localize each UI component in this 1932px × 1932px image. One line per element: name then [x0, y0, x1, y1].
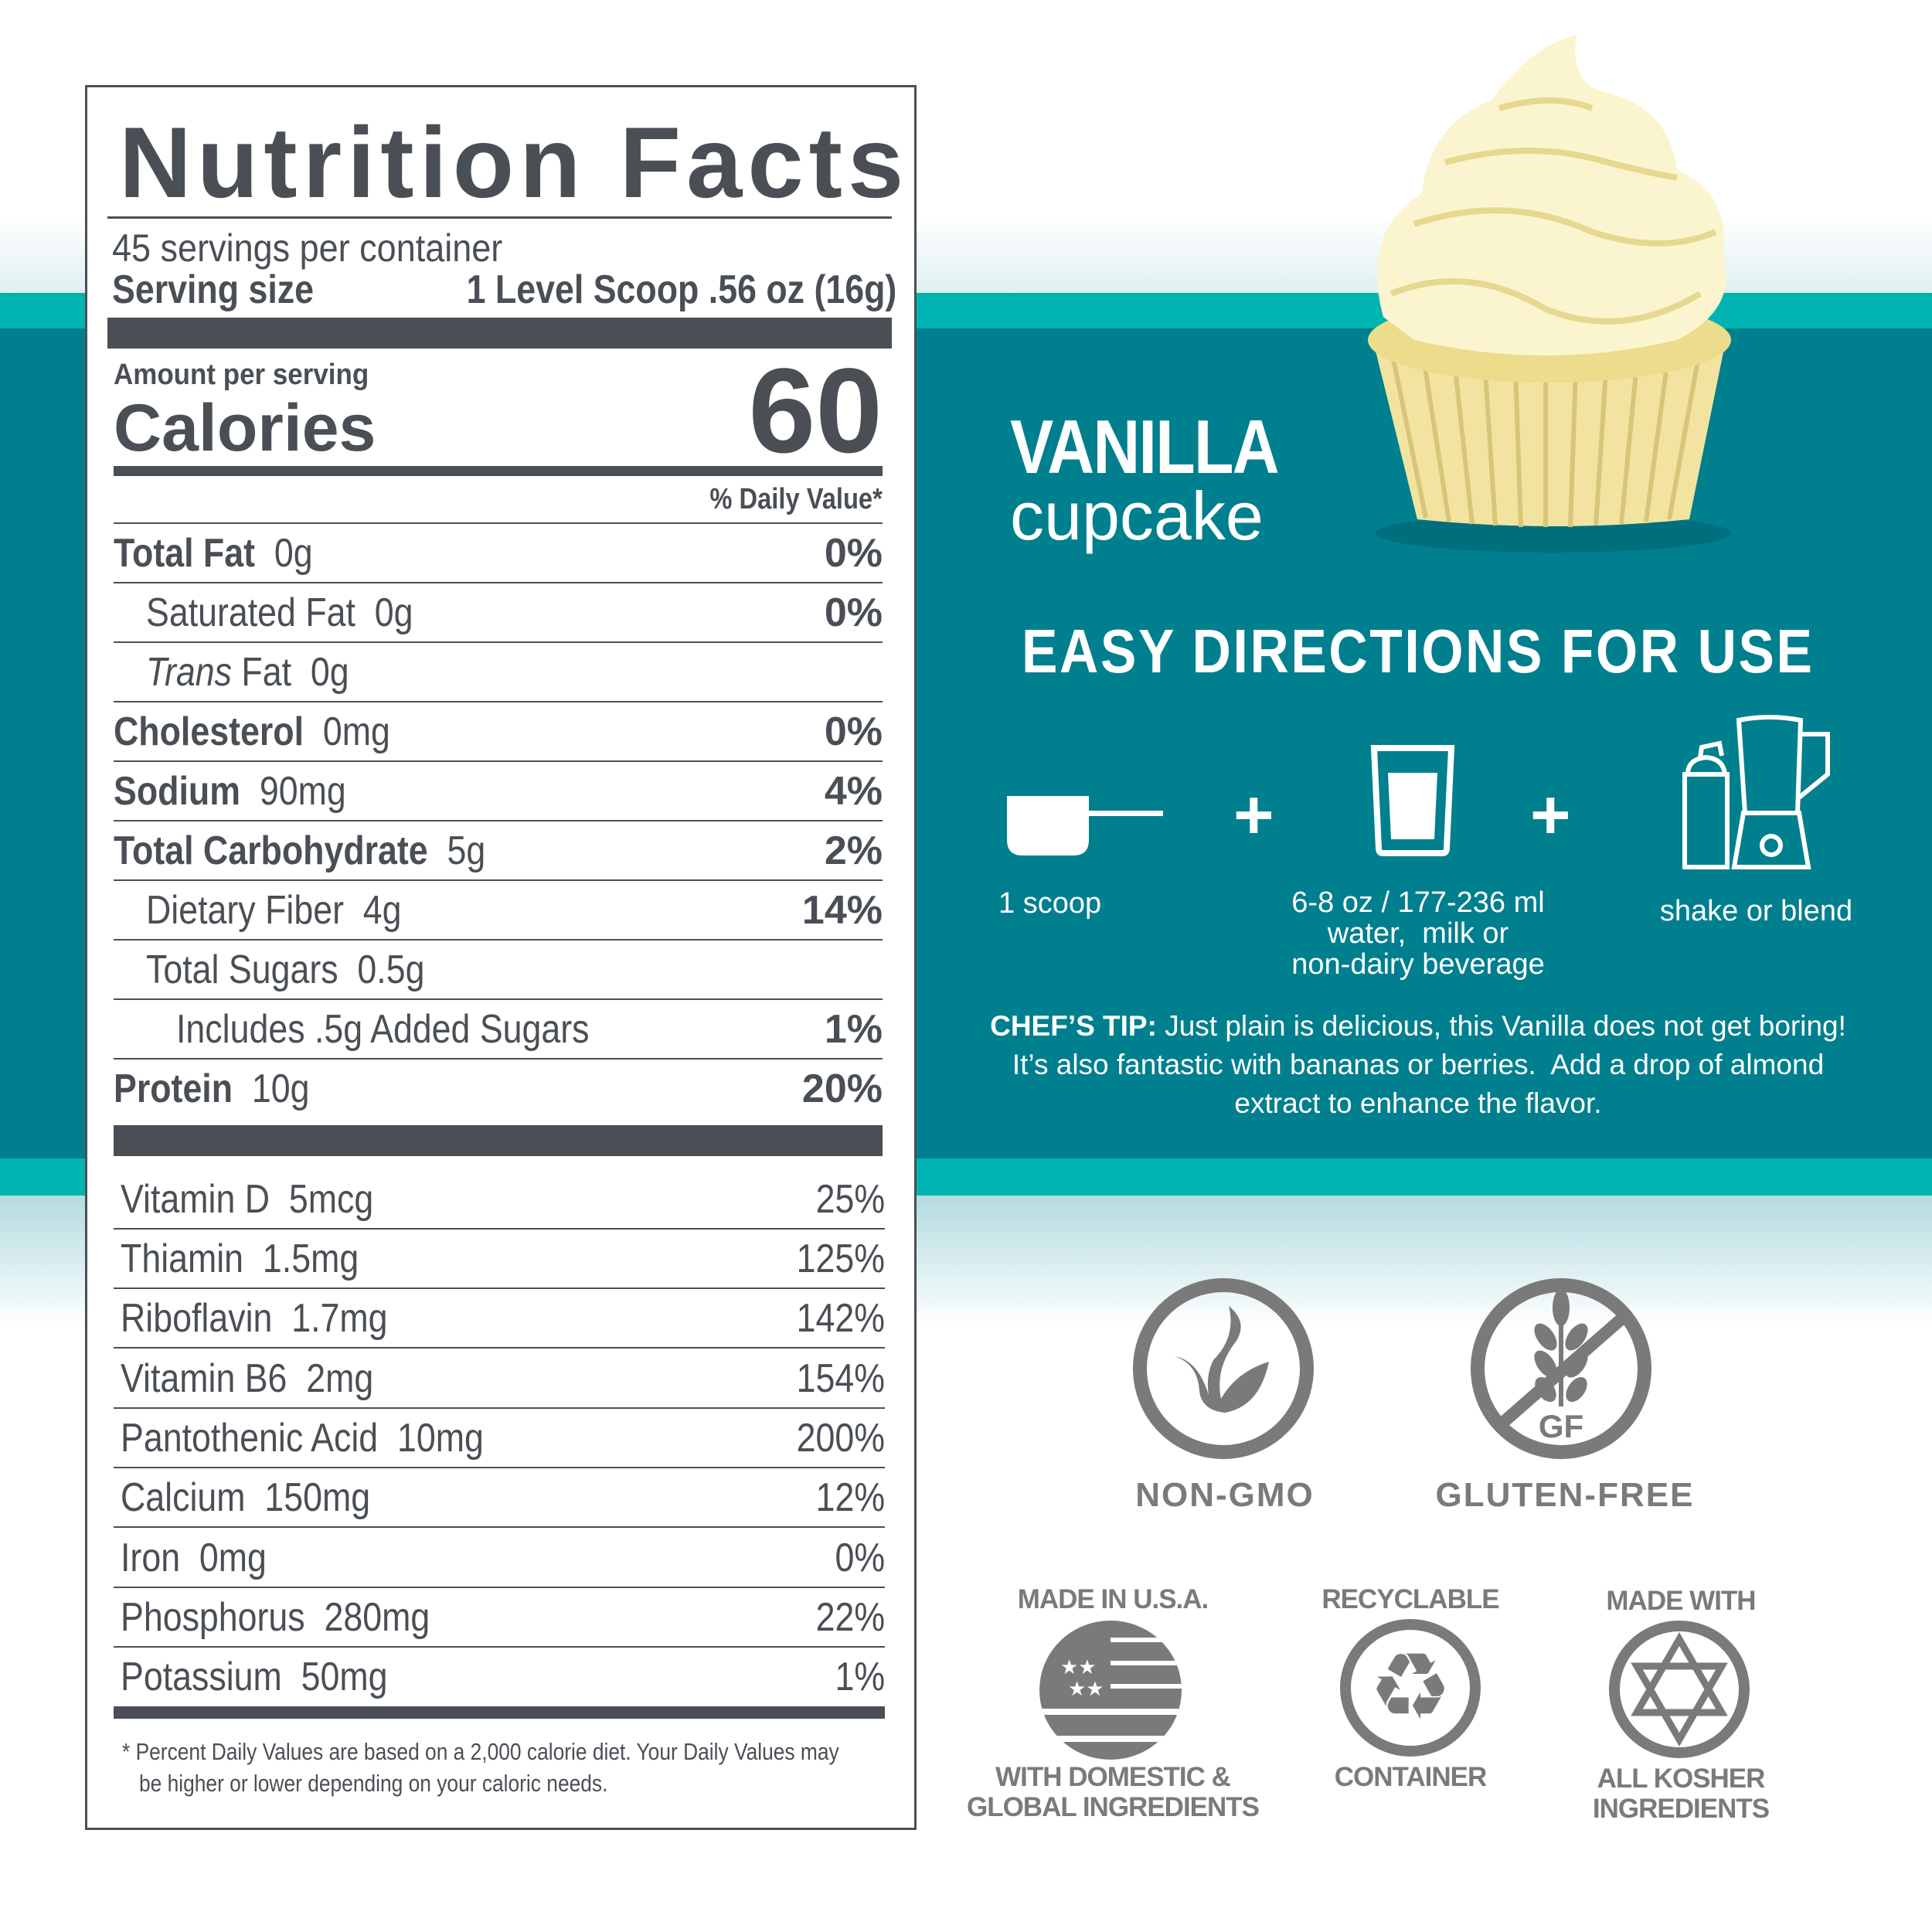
nutrient rows: Cholesterol 0mg	[114, 709, 390, 754]
text: shake or blend	[1660, 895, 1852, 927]
image: cupcake	[1368, 35, 1731, 553]
serving size: 1 Level Scoop .56 oz (16g)	[466, 267, 896, 312]
step labels: 1 scoop	[998, 887, 1101, 920]
badge: recyclable	[1321, 1584, 1499, 1792]
nutrition title: Nutrition Facts	[119, 106, 909, 219]
serving size	[112, 267, 896, 312]
nutrient rows: 20%	[802, 1066, 883, 1111]
vitamin rows: Thiamin 1.5mg	[121, 1236, 359, 1281]
vitamin rows: Vitamin B6 2mg	[121, 1356, 373, 1401]
calories	[114, 344, 883, 478]
nutrient rows: 0%	[825, 531, 883, 576]
footnote: * Percent Daily Values are based on a 2,000 calorie diet. Your Daily Values may	[122, 1738, 839, 1765]
nutrient rows: 0%	[825, 709, 883, 754]
vitamin rows: 125%	[797, 1236, 885, 1281]
badge: made in usa: ★★	[1060, 1655, 1097, 1679]
chef's tip	[990, 1010, 1846, 1119]
nutrient rows: Sodium 90mg	[114, 769, 346, 814]
background band	[0, 236, 1932, 1314]
nutrient rows: 4%	[825, 769, 883, 814]
calories: Amount per serving	[114, 359, 369, 391]
badge: non-gmo	[1133, 1278, 1315, 1514]
badge: gluten-free	[1436, 1278, 1694, 1514]
vitamin rows: Riboflavin 1.7mg	[121, 1296, 388, 1341]
badge: made in usa: WITH DOMESTIC &	[995, 1762, 1230, 1792]
nutrient rows: Includes .5g Added Sugars	[176, 1007, 590, 1052]
badge: kosher: ALL KOSHER	[1597, 1764, 1764, 1794]
text: 6-8 oz / 177-236 ml	[1291, 886, 1545, 919]
vitamin rows: Phosphorus 280mg	[121, 1595, 430, 1640]
nutrient rows: 0%	[825, 590, 883, 635]
vitamin rows: Iron 0mg	[121, 1536, 267, 1580]
badge: made in usa	[967, 1584, 1259, 1822]
daily value header: % Daily Value*	[710, 483, 883, 515]
badge: recyclable: CONTAINER	[1335, 1762, 1486, 1792]
vitamin rows: Vitamin D 5mcg	[121, 1177, 373, 1222]
badge: gluten-free: GLUTEN-FREE	[1436, 1476, 1694, 1514]
chef's tip: CHEF’S TIP: Just plain is delicious, this Vanilla does not get boring!	[990, 1010, 1846, 1042]
nutrient rows: Saturated Fat 0g	[146, 590, 413, 635]
product name: cupcake	[1010, 478, 1264, 554]
product name	[1010, 404, 1278, 554]
vitamin rows	[114, 1177, 885, 1699]
nutrient rows: Total Fat 0g	[114, 531, 313, 576]
footnote: be higher or lower depending on your caloric needs.	[139, 1770, 607, 1797]
heading: easy directions: EASY DIRECTIONS FOR USE	[1022, 617, 1815, 685]
vitamin rows: 0%	[835, 1536, 885, 1580]
text: non-dairy beverage	[1291, 948, 1545, 981]
badge: gluten-free: GF	[1539, 1408, 1583, 1444]
vitamin rows: Calcium 150mg	[121, 1475, 370, 1520]
vitamin rows: 12%	[815, 1475, 885, 1520]
calories: Calories	[114, 391, 376, 465]
badge: recyclable: ♻	[1369, 1635, 1452, 1739]
vitamin rows: 200%	[797, 1416, 885, 1461]
nutrient rows: 2%	[825, 828, 883, 873]
nutrient rows: 14%	[802, 888, 883, 933]
vitamin rows: 22%	[815, 1595, 885, 1640]
vitamin rows: Potassium 50mg	[121, 1655, 387, 1699]
badge: made in usa: GLOBAL INGREDIENTS	[967, 1792, 1259, 1822]
nutrient rows: Total Sugars 0.5g	[146, 947, 424, 992]
footnote	[122, 1738, 839, 1797]
nutrient rows: Protein 10g	[114, 1066, 310, 1111]
badge: kosher: INGREDIENTS	[1593, 1794, 1769, 1824]
icon: shaker and blender	[1682, 715, 1830, 869]
servings: 45 servings per container	[112, 226, 502, 270]
icon: glass	[1371, 745, 1454, 856]
badge: kosher	[1593, 1586, 1769, 1824]
nutrient rows: 1%	[825, 1007, 883, 1052]
vitamin rows: 25%	[815, 1177, 885, 1222]
product name: VANILLA	[1010, 404, 1278, 489]
nutrient rows: Trans Fat 0g	[146, 650, 349, 695]
nutrient rows: Dietary Fiber 4g	[146, 888, 402, 933]
text: water, milk or	[1328, 917, 1509, 950]
nutrient rows: Total Carbohydrate 5g	[114, 828, 485, 873]
badge: kosher: MADE WITH	[1606, 1586, 1756, 1616]
chef's tip: It’s also fantastic with bananas or berries. Add a drop of almond	[1012, 1049, 1824, 1080]
icon: plus 1: +	[1233, 777, 1274, 854]
panel: nutrition facts	[85, 85, 917, 1830]
vitamin rows: 1%	[835, 1655, 885, 1699]
badge: non-gmo: NON-GMO	[1135, 1476, 1315, 1514]
daily value header	[114, 479, 883, 524]
icon: scoop	[1007, 796, 1163, 855]
icon: plus 2: +	[1530, 777, 1571, 854]
badge: made in usa: MADE IN U.S.A.	[1018, 1584, 1208, 1614]
vitamin rows: 142%	[797, 1296, 885, 1341]
badge: recyclable: RECYCLABLE	[1321, 1584, 1499, 1614]
calories: 60	[748, 344, 883, 478]
chef's tip: extract to enhance the flavor.	[1234, 1087, 1602, 1119]
vitamin rows: 154%	[797, 1356, 885, 1401]
vitamin rows: Pantothenic Acid 10mg	[121, 1416, 484, 1461]
nutrient rows	[114, 531, 883, 1111]
badge: made in usa: ★★	[1068, 1677, 1104, 1700]
serving size: Serving size	[112, 267, 314, 312]
